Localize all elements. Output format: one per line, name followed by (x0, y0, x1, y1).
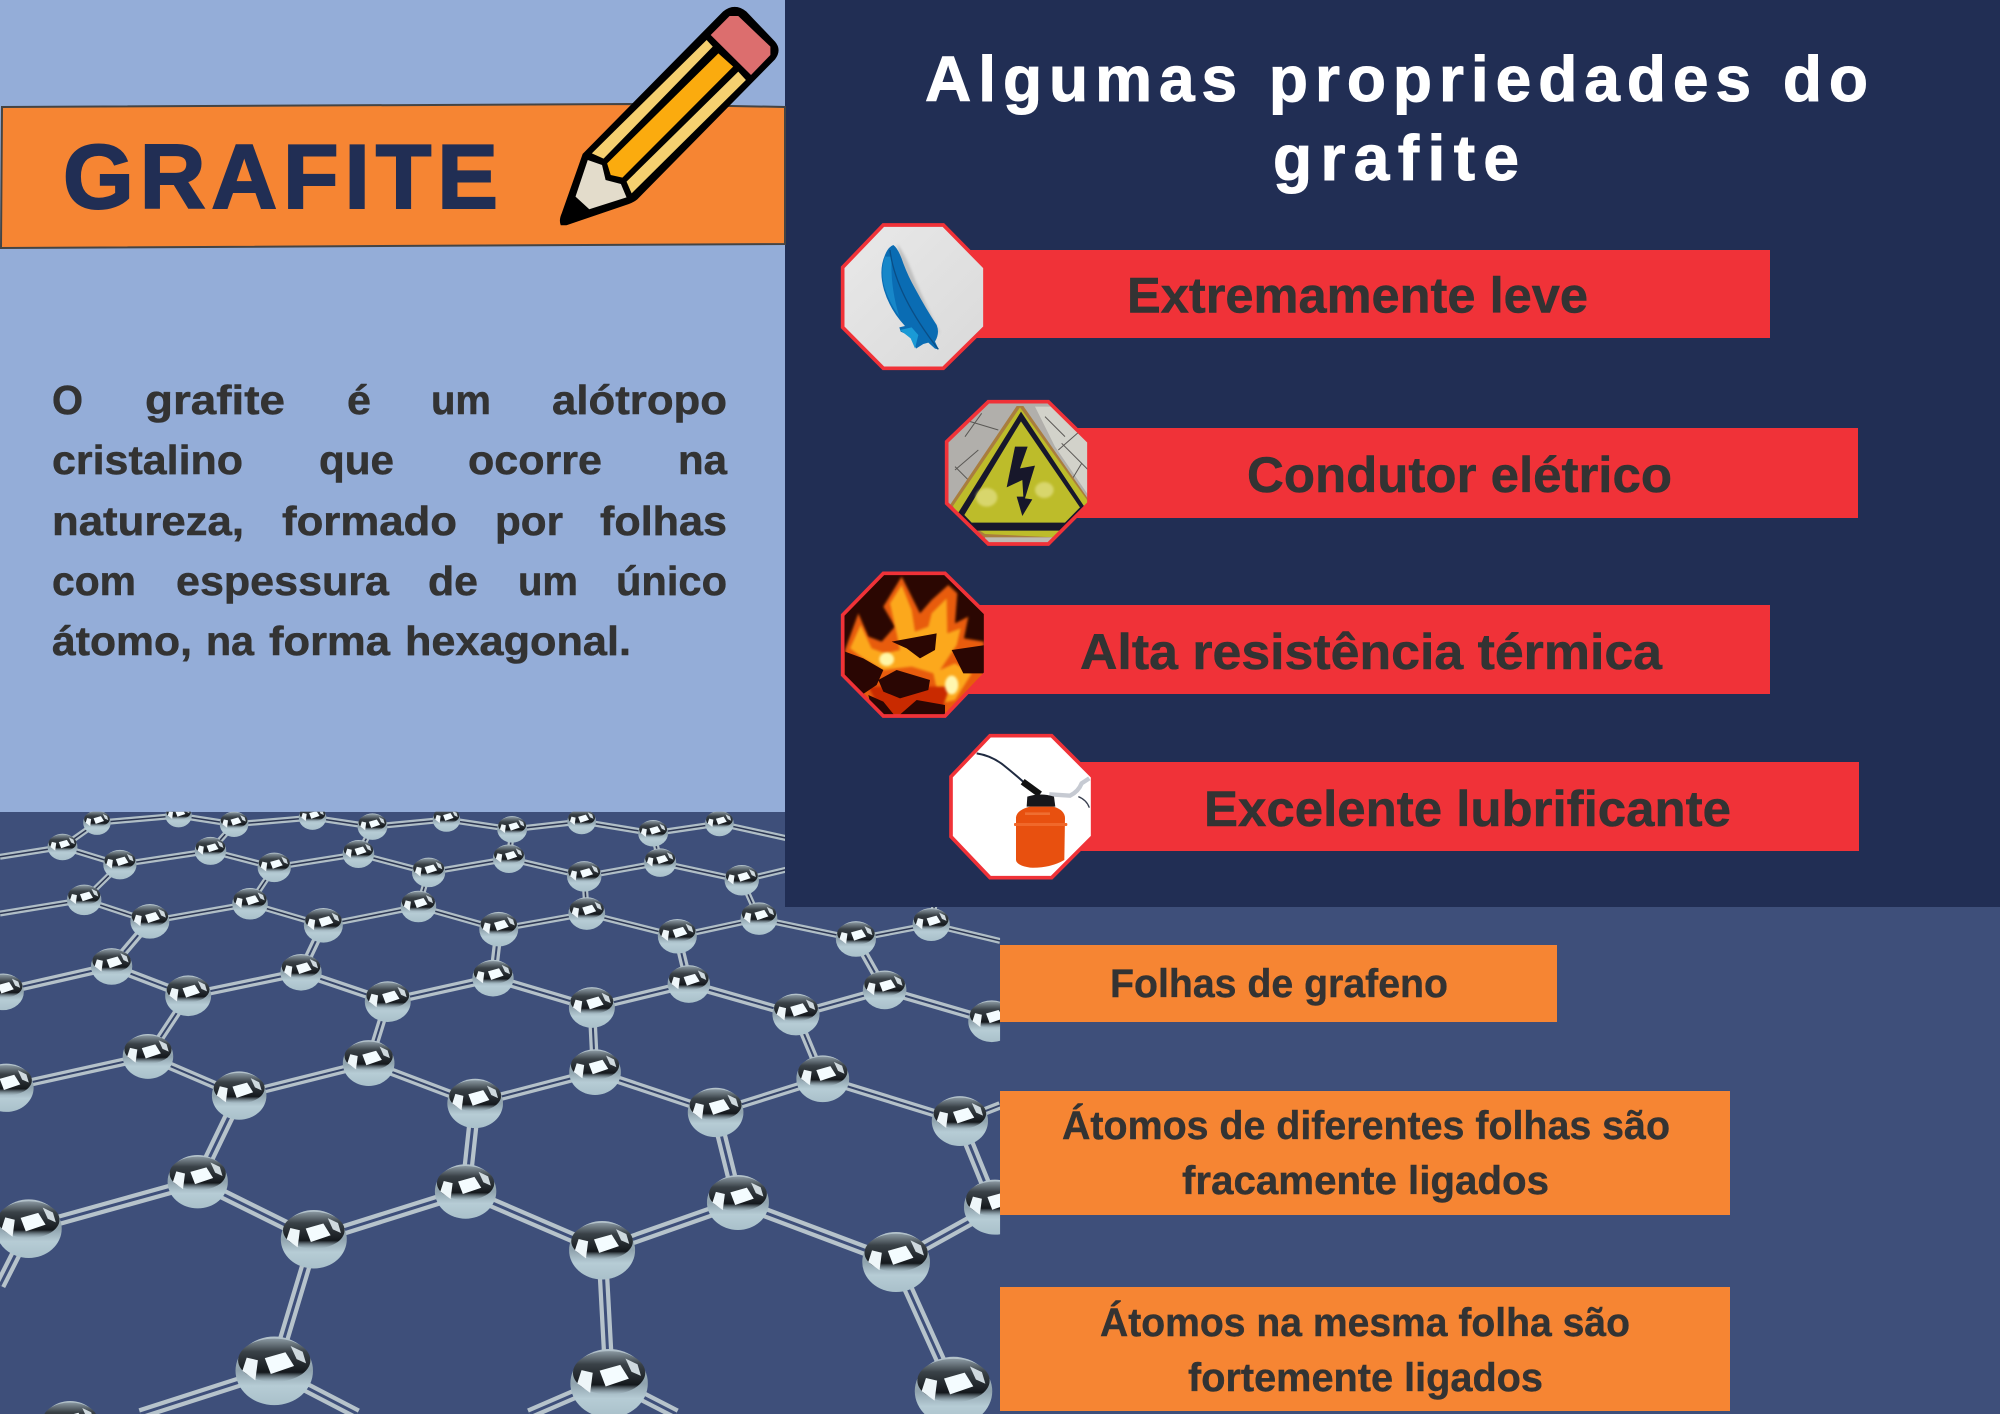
text block: description of graphite: alótropo (552, 377, 727, 423)
callout: Folhas de grafeno (1000, 945, 1557, 1022)
panel: dark navy properties (785, 0, 2000, 907)
text block: description of graphite (52, 377, 728, 664)
text block: description of graphite: hexagonal. (405, 618, 631, 664)
text block: description of graphite: forma (269, 618, 391, 664)
icon frame: oil can (951, 736, 1093, 878)
icon frame: warning sign (947, 402, 1089, 544)
heading: Algumas propriedades do grafite (925, 43, 1868, 194)
heading: Algumas propriedades do grafite: grafite (1273, 122, 1519, 194)
heading: Algumas propriedades do grafite: Algumas propriedades do (925, 43, 1868, 115)
callout: Folhas de grafeno: Folhas de grafeno (1110, 962, 1448, 1006)
icon: pencil (560, 7, 778, 225)
text block: description of graphite: por (495, 498, 563, 544)
property bar: Alta resistência térmica: Alta resistência térmica (1080, 624, 1663, 680)
callout: weak bonds between sheets: fracamente ligados (1182, 1159, 1549, 1203)
text block: description of graphite: na (678, 437, 728, 483)
icon frame: feather (843, 225, 985, 368)
text block: description of graphite: espessura (176, 558, 390, 604)
text block: description of graphite: formado (282, 498, 457, 544)
property bar: Condutor elétrico: Condutor elétrico (1247, 447, 1672, 503)
property bar: Condutor elétrico (1060, 428, 1858, 518)
icon frame: flames (843, 573, 986, 716)
callout: strong bonds within a sheet: fortemente ligados (1188, 1356, 1543, 1400)
text block: description of graphite: natureza, (52, 498, 244, 544)
text block: description of graphite: folhas (600, 498, 727, 544)
text block: description of graphite: átomo, (52, 618, 192, 664)
text block: description of graphite: na (206, 618, 255, 664)
property bar: Extremamente leve (960, 250, 1770, 338)
text block: description of graphite: único (616, 558, 727, 604)
text block: description of graphite: que (319, 437, 394, 483)
text block: description of graphite: grafite (145, 377, 285, 423)
callout: weak bonds between sheets (1000, 1091, 1730, 1215)
text block: description of graphite: O (52, 377, 83, 423)
icon: electrical warning sign (945, 400, 1092, 547)
icon: flames (840, 570, 988, 718)
text block: description of graphite: um (431, 377, 491, 423)
callout: strong bonds within a sheet (1000, 1287, 1730, 1411)
text block: description of graphite: de (428, 558, 478, 604)
title banner: Grafite (1, 104, 785, 248)
text block: description of graphite: ocorre (468, 437, 602, 483)
text block: description of graphite: um (518, 558, 578, 604)
property bar: Excelente lubrificante (1060, 762, 1859, 851)
callout: weak bonds between sheets: Átomos de diferentes folhas são (1062, 1103, 1670, 1148)
chart: graphene hexagonal lattice (0, 804, 1026, 1414)
property bar: Excelente lubrificante: Excelente lubrificante (1204, 781, 1731, 837)
panel: molecule background (0, 804, 2000, 1414)
icon: feather (840, 223, 988, 370)
callout: strong bonds within a sheet: Átomos na mesma folha são (1100, 1300, 1630, 1345)
icon: oil can (950, 735, 1097, 882)
property bar: Extremamente leve: Extremamente leve (1127, 268, 1588, 324)
property bar: Alta resistência térmica (960, 605, 1770, 694)
text block: description of graphite: cristalino (52, 437, 243, 483)
panel: light blue background (0, 0, 785, 812)
text block: description of graphite: com (52, 558, 136, 604)
heading: Grafite: GRAFITE (63, 127, 498, 228)
text block: description of graphite: é (347, 377, 371, 423)
